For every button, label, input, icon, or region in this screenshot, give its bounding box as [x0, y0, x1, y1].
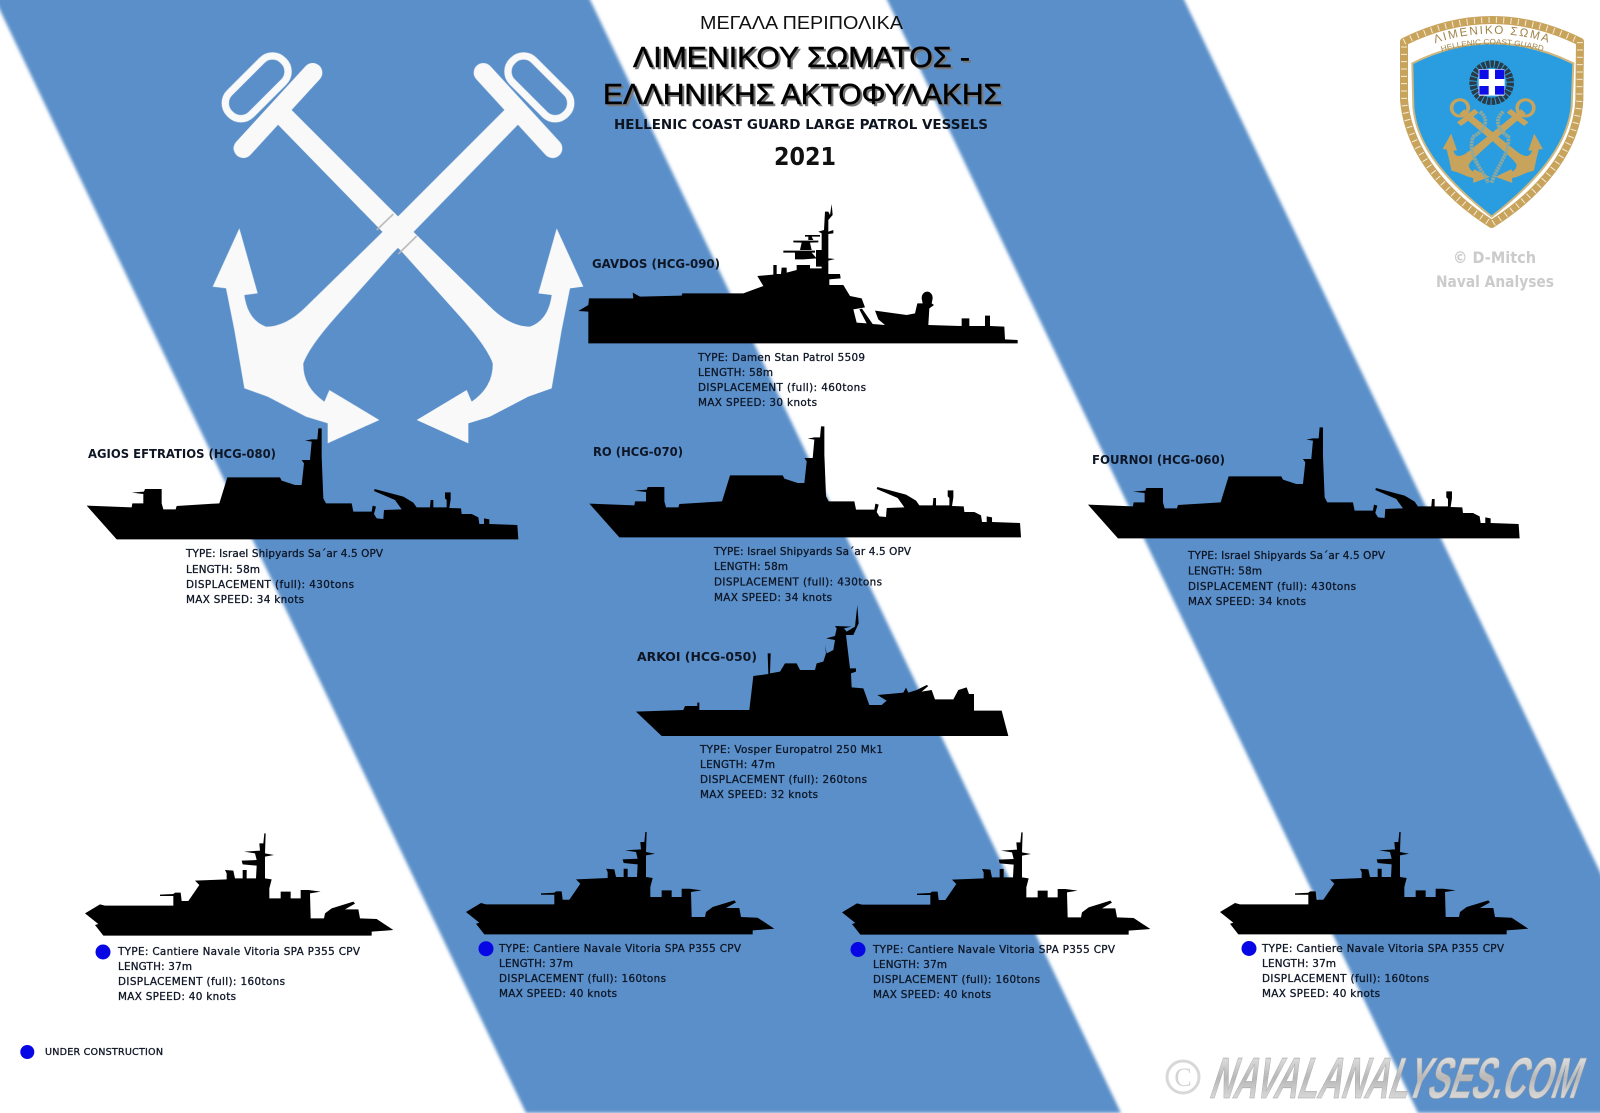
- silhouette: Gavdos: [578, 204, 1018, 343]
- specs: TYPE: Cantiere Navale Vitoria SPA P355 CPV: [872, 944, 1116, 956]
- specs: DISPLACEMENT (full): 430tons: [1188, 581, 1356, 593]
- specs: LENGTH: 58m: [698, 367, 773, 379]
- specs: TYPE: Cantiere Navale Vitoria SPA P355 CPV: [117, 946, 361, 958]
- watermark: D-Mitch Naval Analyses: © D-Mitch: [1453, 248, 1536, 267]
- specs: TYPE: Israel Shipyards Sa´ar 4.5 OPV: [1187, 550, 1386, 562]
- specs: MAX SPEED: 40 knots: [1262, 988, 1380, 1000]
- crest: Hellenic Coast Guard shield: HELLENIC COAST GUARD: [1440, 38, 1544, 52]
- name label: GAVDOS (HCG-090): [592, 257, 720, 271]
- specs: MAX SPEED: 40 knots: [118, 991, 236, 1003]
- specs: LENGTH: 58m: [186, 564, 260, 576]
- specs: [185, 548, 384, 606]
- specs: LENGTH: 37m: [499, 958, 573, 970]
- silhouette: P355: [466, 832, 774, 934]
- crest: Hellenic Coast Guard shield: ΛΙΜΕΝΙΚΟ ΣΩΜΑ: [1435, 26, 1548, 44]
- under construction marker: [850, 942, 866, 957]
- specs: TYPE: Israel Shipyards Sa´ar 4.5 OPV: [185, 548, 384, 560]
- specs: [697, 352, 866, 409]
- ship: P355 CPV 2: [466, 832, 774, 1000]
- watermark: D-Mitch Naval Analyses: Naval Analyses: [1436, 272, 1554, 291]
- ship: AGIOS EFTRATIOS: [87, 428, 518, 606]
- subtitle: HELLENIC COAST GUARD LARGE PATROL VESSELS: [614, 117, 988, 133]
- title block: [603, 12, 1002, 171]
- specs: DISPLACEMENT (full): 460tons: [698, 382, 866, 394]
- specs: LENGTH: 37m: [1262, 958, 1336, 970]
- specs: MAX SPEED: 34 knots: [714, 592, 832, 604]
- specs: TYPE: Cantiere Navale Vitoria SPA P355 CPV: [1261, 943, 1505, 955]
- specs: DISPLACEMENT (full): 160tons: [873, 974, 1040, 986]
- ship: ARKOI: [636, 605, 1008, 801]
- ship: RO: [589, 426, 1021, 604]
- ship: P355 CPV 1: [85, 833, 393, 1003]
- silhouette: Ro: [589, 426, 1021, 537]
- crossed white anchors emblem: [213, 50, 583, 443]
- specs: TYPE: Cantiere Navale Vitoria SPA P355 CPV: [498, 943, 742, 955]
- silhouette: Agios Eftratios: [87, 428, 518, 539]
- specs: MAX SPEED: 34 knots: [1188, 596, 1306, 608]
- specs: TYPE: Vosper Europatrol 250 Mk1: [699, 744, 883, 756]
- specs: [1261, 943, 1505, 1000]
- name label: AGIOS EFTRATIOS (HCG-080): [88, 447, 276, 461]
- watermark: navalanalyses.com: C: [1174, 1063, 1192, 1092]
- specs: [713, 546, 912, 604]
- specs: LENGTH: 37m: [118, 961, 192, 973]
- specs: [872, 944, 1116, 1001]
- specs: DISPLACEMENT (full): 430tons: [186, 579, 354, 591]
- specs: LENGTH: 58m: [714, 561, 788, 573]
- ship: FOURNOI: [1088, 427, 1520, 608]
- name label: ARKOI (HCG-050): [637, 650, 757, 664]
- under construction marker: [96, 944, 110, 960]
- specs: DISPLACEMENT (full): 160tons: [118, 976, 285, 988]
- title: main line 1: ΛΙΜΕΝΙΚΟΥ ΣΩΜΑΤΟΣ -: [633, 42, 970, 74]
- specs: TYPE: Israel Shipyards Sa´ar 4.5 OPV: [713, 546, 912, 558]
- under construction marker: [478, 941, 494, 956]
- legend text: UNDER CONSTRUCTION: [45, 1047, 163, 1058]
- name label: FOURNOI (HCG-060): [1092, 453, 1225, 467]
- legend dot: [20, 1045, 34, 1059]
- specs: [498, 943, 742, 1000]
- specs: DISPLACEMENT (full): 430tons: [714, 576, 882, 588]
- watermark: D-Mitch Naval Analyses: [1436, 248, 1554, 291]
- legend: under construction: [20, 1045, 163, 1059]
- specs: LENGTH: 37m: [873, 959, 947, 971]
- ship: P355 CPV 3: [842, 832, 1150, 1001]
- specs: DISPLACEMENT (full): 260tons: [700, 774, 867, 786]
- specs: DISPLACEMENT (full): 160tons: [499, 973, 666, 985]
- crest: Hellenic Coast Guard shield: [1400, 16, 1584, 228]
- ship: P355 CPV 4: [1220, 832, 1528, 1000]
- specs: MAX SPEED: 34 knots: [186, 594, 304, 606]
- specs: [699, 744, 883, 801]
- title: Greek overline: ΜΕΓΑΛΑ ΠΕΡΙΠΟΛΙΚΑ: [700, 12, 904, 33]
- specs: MAX SPEED: 30 knots: [698, 397, 817, 409]
- title: main line 2: ΕΛΛΗΝΙΚΗΣ ΑΚΤΟΦΥΛΑΚΗΣ: [603, 79, 1002, 111]
- specs: LENGTH: 47m: [700, 759, 775, 771]
- specs: [117, 946, 361, 1003]
- silhouette: P355: [842, 832, 1150, 935]
- specs: MAX SPEED: 40 knots: [873, 989, 991, 1001]
- specs: LENGTH: 58m: [1188, 566, 1262, 578]
- silhouette: Arkoi: [636, 605, 1008, 736]
- silhouette: P355: [85, 833, 393, 936]
- specs: MAX SPEED: 40 knots: [499, 988, 617, 1000]
- silhouette: P355: [1220, 832, 1528, 934]
- specs: TYPE: Damen Stan Patrol 5509: [697, 352, 865, 364]
- name label: RO (HCG-070): [593, 445, 683, 459]
- specs: [1187, 550, 1386, 608]
- under construction marker: [1242, 941, 1256, 956]
- ship: GAVDOS: [578, 204, 1018, 409]
- specs: DISPLACEMENT (full): 160tons: [1262, 973, 1429, 985]
- specs: MAX SPEED: 32 knots: [700, 789, 818, 801]
- silhouette: Fournoi: [1088, 427, 1520, 538]
- year: 2021: [774, 142, 836, 171]
